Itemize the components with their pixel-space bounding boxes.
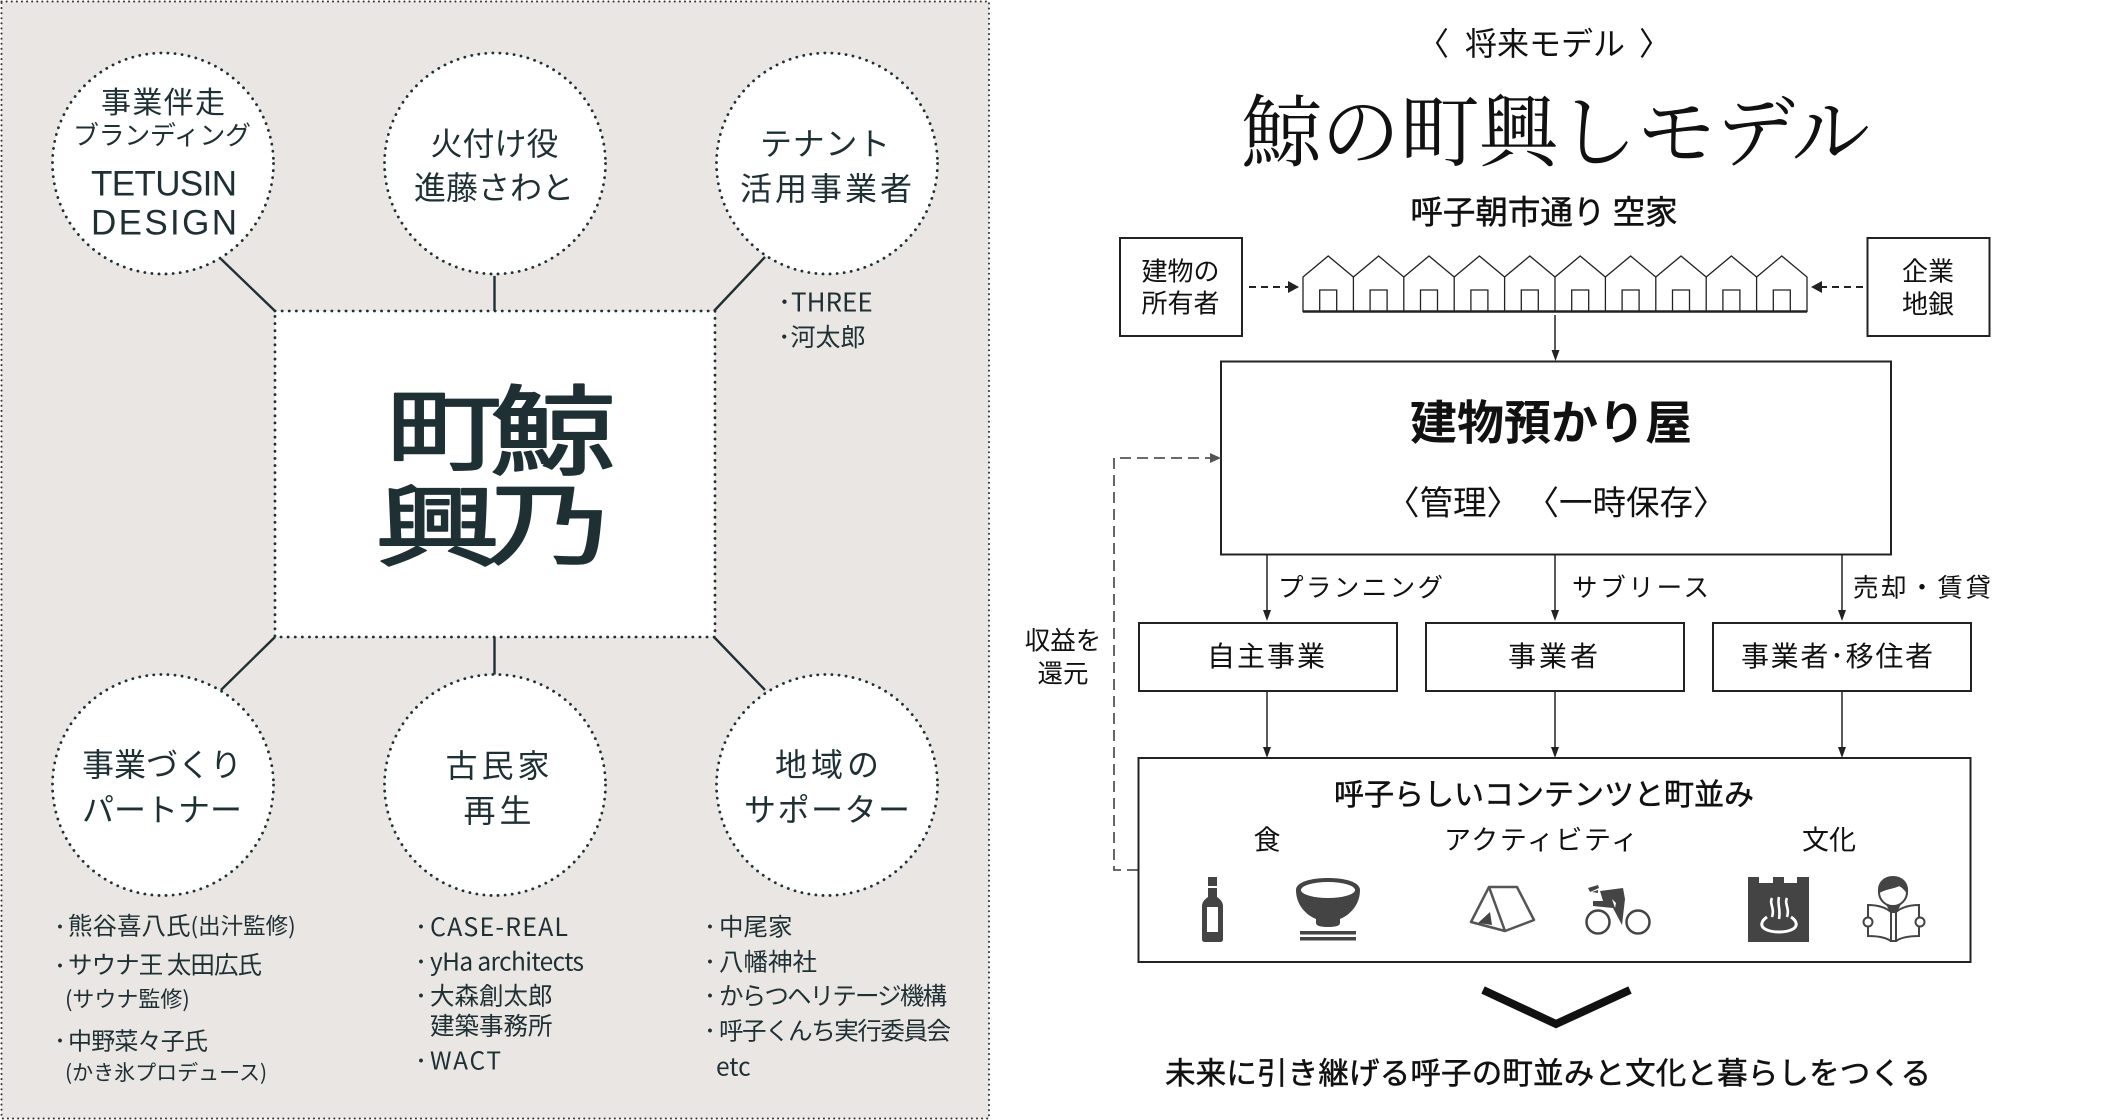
icon: cyclist	[1586, 885, 1650, 934]
list: business partners: ･	[54, 946, 66, 982]
list: old house revival: WACT	[430, 1042, 501, 1078]
circle: old house revival	[384, 674, 606, 896]
box: building keeper: 建物預かり屋	[1410, 384, 1692, 454]
arrow: operators to contents	[1551, 691, 1559, 758]
icon: sake bottle	[1202, 877, 1223, 942]
list: local supporters: ･	[704, 942, 716, 978]
circle: igniter: 火付け役	[430, 119, 559, 165]
circle: tenant operators: テナント	[760, 119, 890, 165]
list: old house revival: 大森創太郎	[430, 978, 552, 1012]
list: tenant operators	[778, 282, 873, 354]
arrow: planning	[1263, 555, 1271, 621]
circle: old house revival: 再生	[464, 786, 532, 832]
list: local supporters: ･	[704, 908, 716, 942]
box: companies and local banks	[1868, 238, 1990, 336]
box: building owners: 所有者	[1141, 284, 1220, 320]
list: business partners: サウナ王 太田広氏	[68, 946, 262, 982]
chevron arrow	[1483, 990, 1630, 1024]
list: old house revival: ･	[415, 1042, 427, 1076]
box: contents and townscape: 文化	[1802, 818, 1856, 858]
circle: business partners: パートナー	[82, 785, 242, 831]
circle: igniter: 進藤さわと	[414, 163, 574, 209]
icon: person reading	[1864, 877, 1924, 941]
logo wordmark: 鯨	[489, 353, 616, 495]
heading: vacant houses: 呼子朝市通り 空家	[1410, 186, 1678, 234]
arrow: companies to houses	[1811, 281, 1863, 293]
label: return profit: 収益を	[1025, 620, 1101, 658]
connector lines	[221, 257, 765, 690]
label: sublease: サブリース	[1572, 568, 1709, 604]
label: sale and lease: 売却・賃貸	[1853, 568, 1991, 604]
list: business partners	[54, 908, 296, 1087]
list: old house revival	[415, 908, 584, 1078]
panel: future model diagram	[1025, 19, 1991, 1093]
box: own business: 自主事業	[1207, 635, 1325, 675]
box: building owners: 建物の	[1141, 252, 1220, 288]
circle: branding: ブランディング	[73, 116, 251, 152]
arrow: own business to contents	[1263, 691, 1271, 758]
logo wordmark: 興	[375, 458, 500, 584]
circle: business partners: 事業づくり	[82, 740, 242, 786]
icon: rice bowl and chopsticks	[1296, 878, 1360, 940]
list: business partners: 熊谷喜八氏(出汁監修)	[68, 908, 296, 942]
list: business partners: (かき氷プロデュース)	[65, 1057, 267, 1087]
box: contents and townscape	[1138, 758, 1970, 962]
box: own business	[1139, 623, 1397, 691]
box: contents and townscape: アクティビティ	[1444, 818, 1638, 858]
logo wordmark: 乃	[487, 453, 609, 583]
list: local supporters: ･	[704, 976, 716, 1012]
circle: branding: 事業伴走	[101, 78, 225, 122]
box: building keeper: 〈一時保存〉	[1526, 476, 1726, 524]
list: local supporters: etc	[716, 1048, 751, 1084]
label: return profit: 還元	[1037, 654, 1089, 690]
list: business partners: ･	[54, 908, 66, 942]
list: local supporters: 中尾家	[719, 908, 792, 944]
list: tenant operators: ･THREE	[778, 282, 873, 320]
circle: tenant operators: 活用事業者	[740, 164, 912, 210]
logo wordmark: 町	[387, 361, 501, 489]
subtitle: 〉	[1639, 19, 1671, 65]
list: local supporters	[704, 908, 951, 1084]
subtitle: 将来モデル	[1465, 19, 1625, 65]
icon: row of ten vacant houses	[1303, 256, 1807, 312]
list: old house revival: ･	[415, 976, 427, 1012]
list: old house revival: ･	[415, 942, 427, 978]
circle: tenant operators	[716, 53, 938, 274]
arrow: settlers to contents	[1838, 691, 1846, 758]
circle: local supporters: 地域の	[775, 740, 879, 786]
box: contents and townscape: 食	[1254, 818, 1280, 858]
arrow: sublease	[1551, 555, 1559, 621]
subtitle	[1417, 19, 1671, 65]
circle: business partners	[52, 674, 274, 896]
circle: branding	[52, 53, 274, 274]
box: building owners	[1120, 238, 1242, 336]
list: old house revival: yHa architects	[430, 944, 584, 978]
box: operators	[1426, 623, 1684, 691]
box: building keeper: 〈管理〉	[1386, 476, 1520, 524]
box: contents and townscape: 呼子らしいコンテンツと町並み	[1334, 770, 1754, 814]
subtitle: 〈	[1417, 19, 1449, 65]
panel: organisation network	[2, 2, 989, 1118]
list: business partners: 中野菜々子氏	[68, 1022, 208, 1056]
list: business partners: (サウナ監修)	[65, 982, 190, 1014]
list: local supporters: ･	[704, 1012, 716, 1046]
icon: tent	[1471, 887, 1534, 931]
centre logo box	[275, 311, 715, 637]
arrow: profit returned	[1114, 453, 1221, 870]
list: old house revival: ･	[415, 908, 427, 942]
circle: local supporters: サポーター	[744, 785, 910, 831]
list: business partners: ･	[54, 1022, 66, 1056]
box: operators: 事業者	[1508, 635, 1598, 675]
box: operators and settlers	[1713, 623, 1971, 691]
circle: old house revival: 古民家	[446, 741, 550, 787]
arrow: owners to houses	[1249, 281, 1299, 293]
label: return profit	[1025, 620, 1101, 690]
list: tenant operators: ･河太郎	[778, 318, 866, 354]
list: local supporters: からつヘリテージ機構	[719, 978, 947, 1012]
icon: hot spring banner	[1748, 877, 1809, 942]
circle: local supporters	[716, 674, 938, 896]
list: old house revival: 建築事務所	[430, 1008, 552, 1042]
list: local supporters: 呼子くんち実行委員会	[719, 1012, 951, 1048]
circle: igniter	[384, 53, 606, 274]
list: old house revival: CASE-REAL	[430, 908, 568, 944]
circle: branding: DESIGN	[91, 204, 237, 242]
label: planning: プランニング	[1278, 568, 1443, 604]
arrow: sale and lease	[1838, 555, 1846, 621]
arrow: houses to storage	[1552, 315, 1560, 361]
box: building keeper	[1221, 362, 1891, 554]
circle: branding: TETUSIN	[91, 164, 237, 204]
logo wordmark	[375, 353, 616, 584]
list: local supporters: 八幡神社	[719, 944, 817, 978]
conclusion text: 未来に引き継げる呼子の町並みと文化と暮らしをつくる	[1165, 1049, 1931, 1093]
box: operators and settlers: 事業者･移住者	[1741, 635, 1933, 675]
box: companies and local banks: 地銀	[1902, 284, 1954, 322]
box: companies and local banks: 企業	[1902, 252, 1954, 288]
title: 鯨の町興しモデル	[1242, 69, 1870, 183]
